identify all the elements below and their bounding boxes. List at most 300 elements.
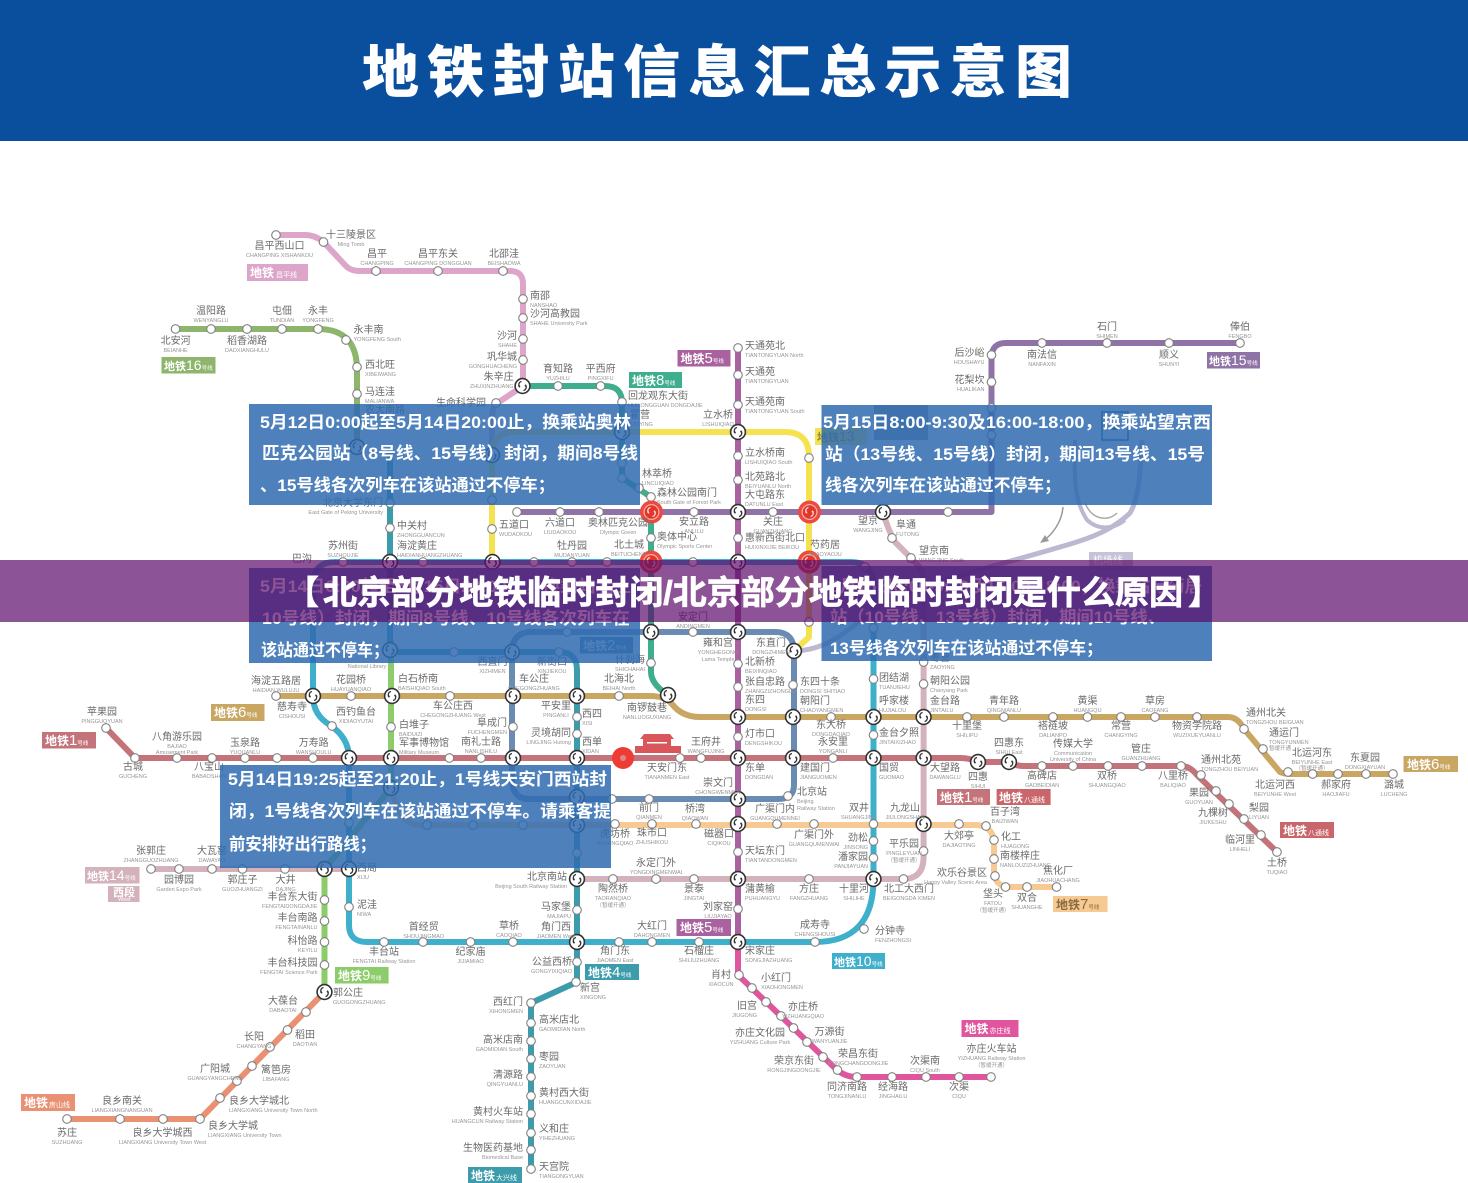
station labels: south-west: 苏庄 [57, 1128, 77, 1139]
badge: line 8: 地铁8号线 [632, 372, 676, 389]
station labels: south-west: MAJIAPU [547, 914, 571, 920]
station labels: north: 惠新西街北口 [745, 533, 805, 544]
station labels: north: 霍营 [630, 410, 650, 421]
station labels: east: GUOMAO [879, 775, 905, 781]
station labels: north: WANGJING South [919, 558, 964, 564]
station labels: east: DAJIAOTING [942, 843, 976, 849]
station labels: south-west: FENGTAINANLU [275, 925, 318, 931]
station labels: east: 九龙山 [890, 803, 920, 814]
station labels: east: 物资学院路 [1172, 721, 1222, 732]
station labels: south-west: LIANGXIANG University Town West [119, 1140, 207, 1146]
station labels: south-west: JIJIAMIAO [457, 959, 484, 965]
station labels: south-west: GAOMIDIAN North [539, 1027, 585, 1033]
station labels: north: CHANGPING DONGGUAN [404, 261, 472, 267]
station labels: east: 亦庄文化园 [735, 1028, 785, 1039]
station labels: north: WUDAOKOU [499, 532, 532, 538]
station labels: east: 暂缓开通 [1269, 744, 1292, 752]
station labels: north: ZHONGGUANCUN [397, 533, 445, 539]
badge: line 14 west section: West [118, 897, 131, 903]
station labels: centre and west: 大红门 [637, 921, 667, 932]
station labels: south-west: 天宫院 [539, 1162, 569, 1173]
line: Changping [276, 235, 523, 455]
station labels: south-west: LIANGXIANGNANGUAN [91, 1108, 153, 1114]
station labels: centre and west: National Library [348, 664, 387, 670]
station labels: south-west: 大葆台 [268, 996, 298, 1007]
station labels: south-west: 新宫 [580, 983, 600, 994]
badge: Batong line lower: 地铁八通线 [1283, 823, 1329, 838]
station labels: east: 金台夕照 [879, 728, 919, 739]
station labels: centre and west: CHONGWENMEN [695, 790, 741, 796]
station labels: centre and west: 西直门 [478, 657, 508, 668]
station labels: north: SHUNYI [1159, 362, 1180, 368]
station labels: north: 巩华城 [487, 352, 517, 363]
station labels: centre and west: 雍和宫 [703, 638, 733, 649]
station labels: east: YIZHUANG Railway Station [958, 1056, 1025, 1062]
station labels: east: GAOBEIDIAN [1025, 783, 1059, 789]
station labels: centre and west: 崇文门 [703, 778, 733, 789]
station labels: north: SHAOYAOJU [808, 552, 842, 558]
station labels: centre and west: 石榴庄 [684, 946, 714, 957]
station labels: south-west: 草桥 [499, 921, 519, 932]
station labels: south-west: DAOTIAN [293, 1042, 317, 1048]
station labels: east: FATOU [984, 901, 1002, 907]
station labels: centre and west: JINSONG [844, 845, 868, 851]
station labels: east: JINTAIXIZHAO [879, 740, 917, 746]
station labels: south-west: XINGONG [580, 995, 606, 1001]
station labels: east: 次渠南 [910, 1056, 940, 1067]
station labels: east: DONGXIAYUAN [1345, 765, 1385, 771]
station labels: south-west: 郭公庄 [333, 988, 363, 999]
station labels: south-west: DAWAYAO [199, 858, 226, 864]
station labels: centre and west: ZHANGZIZHONGLU [745, 689, 796, 695]
badge: line 14: 地铁14号线 [87, 867, 136, 883]
station labels: centre and west: 张自忠路 [745, 677, 785, 688]
station labels: south-west: XIHONGMEN [489, 1009, 523, 1015]
station labels: east: XIAOHONGMEN [761, 985, 803, 991]
station labels: north: 昌平 [367, 249, 387, 260]
station labels: south-west: ZHANGGUOZHUANG [124, 858, 178, 864]
station labels: east: 梨园 [1249, 803, 1269, 814]
line 16 [175, 329, 357, 450]
station labels: north: TIANTONGYUAN South [745, 409, 804, 415]
station labels: north: 顺义 [1159, 350, 1179, 361]
station labels: east: 四惠东 [994, 738, 1024, 749]
station labels: north: 沙河 [497, 331, 517, 342]
station labels: south-west: 大井 [276, 875, 296, 886]
station labels: centre and west: CISHOUSI [279, 714, 306, 720]
station labels: north: Olympic Sports Center [657, 544, 712, 550]
station labels: centre and west: 白石桥南 [398, 674, 438, 685]
station labels: east: SHUANGHE [1011, 905, 1043, 911]
station labels: centre and west: 北新桥 [745, 657, 775, 668]
station labels: east: University of China [1050, 757, 1097, 763]
station labels: north: 立水桥 [703, 410, 733, 421]
badge: line 2: 地铁2号线 [583, 637, 627, 654]
station labels: centre and west: BEIHAI North [602, 686, 636, 692]
station labels: centre and west: 十里河 [839, 884, 869, 895]
station labels: centre and west: DENGSHIKOU [745, 741, 782, 747]
Yizhuang line [738, 942, 991, 1077]
station labels: south-west: 稻田 [295, 1030, 315, 1041]
station labels: east: 国贸 [879, 763, 899, 774]
badge: Batong line upper: 地铁八通线 [999, 790, 1045, 805]
station labels: south-west: 良乡大学城 [208, 1121, 258, 1132]
station labels: north: GUANZHUANG [753, 529, 793, 535]
station labels: centre and west: 广渠门外 [794, 830, 834, 841]
station labels: centre and west: PINGGUOYUAN [81, 719, 123, 725]
station labels: centre and west [81, 636, 912, 964]
station labels: centre and west: CHENGSHOUSI [795, 932, 836, 938]
station labels: centre and west: 西四 [582, 709, 602, 720]
station labels: centre and west: FUCHENGMEN [468, 730, 507, 736]
station labels: north: SUZHOUJIE [327, 553, 359, 559]
station labels: centre and west: XIZHIMEN [479, 669, 506, 675]
icon: Tiananmen gate [635, 734, 681, 753]
station labels: north: FENGBO [1228, 334, 1252, 340]
station labels: east: CIQU [952, 1094, 966, 1100]
station labels: centre and west: PINGANLI [543, 713, 569, 719]
station labels: east: 北工大西门 [884, 884, 934, 895]
station labels: east: 常营 [1111, 721, 1131, 732]
station labels: north: 沙河高教园 [530, 309, 580, 320]
station labels: east: （暂缓开通） [1295, 764, 1329, 772]
station labels: centre and west: 古城 [123, 762, 143, 773]
station labels: centre and west: 王府井 [691, 737, 721, 748]
station labels: north: 生命科学园 [436, 396, 486, 409]
station labels: east: Communication [1054, 751, 1092, 757]
station labels: east: 潞城 [1384, 780, 1404, 791]
station labels: north: TIANTONGYUAN [745, 379, 789, 385]
station labels: east: HUANGQU [1073, 708, 1102, 714]
badge: Fangshan line: 地铁房山线 [24, 1095, 70, 1110]
station labels: centre and west: 苹果园 [87, 707, 117, 718]
station labels: east: XIAOCUN [708, 982, 734, 988]
station labels: south-west: SUZHUANG [52, 1140, 82, 1146]
station labels: north: 永丰 [308, 306, 328, 317]
station labels: south-west: 科怡路 [288, 936, 318, 947]
station labels: centre and west: NANLUOGUXIANG [623, 715, 671, 721]
airport express line [794, 440, 1142, 651]
station labels: east: BAIZIWAN [992, 819, 1018, 825]
station labels: east: 百子湾 [990, 807, 1020, 818]
station labels: east: 亦庄火车站 [966, 1044, 1016, 1055]
station labels: centre and west: PANJIAYUAN [834, 864, 868, 870]
station labels: centre and west: 玉泉路 [230, 738, 260, 749]
station labels: north: 中关村 [397, 521, 427, 532]
badge: Changping line: 地铁 昌平线 [250, 265, 297, 280]
station labels: centre and west: TAORANQIAO [595, 896, 632, 902]
station labels: centre and west: XISI [582, 721, 593, 727]
station labels: centre and west: （暂缓开通） [596, 901, 630, 909]
station labels: east: BEIGONGDA XIMEN [883, 896, 935, 902]
station labels: south-west: 首经贸 [409, 922, 439, 933]
station labels: east: RONGCHANGDONGJIE [828, 1061, 889, 1067]
station labels: east: 十里堡 [952, 721, 982, 732]
station labels: north: BEIYUANLU North [745, 484, 791, 490]
station labels: centre and west: 灵境胡同 [531, 728, 571, 739]
station labels: centre and west: 成寿寺 [800, 920, 830, 931]
station labels: south-west: 马家堡 [541, 902, 571, 913]
station labels: centre and west: 方庄 [799, 884, 819, 895]
station labels: north: 平西府 [586, 364, 616, 375]
station labels: east: 北运河东 [1292, 748, 1332, 759]
station labels: centre and west: 阜成门 [477, 718, 507, 729]
station labels: east: 亦庄桥 [788, 1002, 818, 1013]
badge: line 14 west section: 西段 [113, 887, 135, 899]
station labels: south-west: GAOMIDIAN South [476, 1047, 523, 1053]
station labels: centre and west: ZHUSHIKOU [636, 840, 668, 846]
panel: Tiananmen West closure notice: 闭，1号线各次列车在该站通过不停车。请乘客提 [229, 801, 611, 821]
panel: Tiananmen West closure notice [220, 765, 611, 868]
station labels: east: 南楼梓庄 [1000, 851, 1040, 862]
station labels: north: 北土城 [614, 540, 644, 551]
header bar [0, 0, 1468, 141]
station labels: east: 东夏园 [1350, 753, 1380, 764]
station labels: centre and west: YONGDINGMENWAI [630, 870, 683, 876]
station labels: north: 芍药居 [810, 540, 840, 551]
station labels: centre and west: SONGJIAZHUANG [745, 958, 792, 964]
station labels: east: WANYUANJIE [812, 1039, 848, 1045]
station labels: centre and west: SHICHAHAI [615, 667, 645, 673]
station labels: north: 海淀黄庄 [397, 541, 437, 552]
station labels: centre and west: 分钟寺 [875, 926, 905, 937]
panel: Olympic Green closure notice: 、15号线各次列车在该站通过不停车； [260, 475, 555, 495]
station labels: east: 垡头 [983, 889, 1003, 900]
station labels: east: JIUGONG [732, 1013, 757, 1019]
station labels: east: 大望路 [930, 763, 960, 774]
station labels: east: 呼家楼 [879, 696, 909, 707]
line 2 ring [512, 632, 794, 799]
station labels: east: JINTAILU [930, 708, 953, 714]
station labels: east: CAOFANG [1142, 708, 1168, 714]
station labels: east: WUZIXUEYUANLU [1173, 733, 1221, 739]
station labels: south-west: 丰台科技园 [268, 958, 318, 969]
station labels: east: 荣昌东街 [838, 1049, 878, 1060]
station labels: north: 稻香湖路 [227, 336, 267, 347]
station labels: south-west: LIANGXIANG University Town [208, 1133, 282, 1139]
station labels: north: TIANTONGYUAN North [745, 353, 804, 359]
station labels: north: LISHUIQIAO South [745, 460, 792, 466]
station labels: east: 平乐园 [889, 839, 919, 850]
station labels: south-west: CHANGYANG [236, 1044, 272, 1050]
station labels: east: 通州北关 [1246, 708, 1286, 719]
station labels: east: BALIQIAO [1160, 783, 1187, 789]
station labels: south-west: XIJU [357, 875, 369, 881]
station labels: centre and west: 永定门外 [636, 858, 676, 869]
station labels: east: LINHELI [1230, 847, 1251, 853]
station labels: north: NANFAXIN [1028, 362, 1056, 368]
station labels: north: East Gate of Peking University [308, 510, 383, 516]
station labels: south-west: 泥洼 [357, 900, 377, 911]
station labels: centre and west: HUFANGQIAO [597, 841, 634, 847]
station labels: east: 金台路 [930, 696, 960, 707]
station labels: east: SHUANGQIAO [1088, 783, 1126, 789]
badge: line 15: 地铁15号线 [1209, 352, 1258, 368]
station labels: east: YIZHUANG Culture Park [730, 1040, 791, 1046]
station labels: east: 青年路 [989, 696, 1019, 707]
station labels: south-west: HUANGCUNXIDAJIE [539, 1100, 592, 1106]
station labels: south-west: 大瓦窑 [197, 846, 227, 857]
station labels: east: 管庄 [1131, 744, 1151, 755]
station labels: east: 万源街 [814, 1027, 844, 1038]
station labels: centre and west: 陶然桥 [598, 884, 628, 895]
station labels: centre and west: 东直门 [756, 638, 786, 649]
station labels: north: LIUDAOKOU [544, 530, 576, 536]
station labels: south-west: ZAOYUAN [539, 1064, 566, 1070]
line 5 [735, 348, 741, 942]
station labels: centre and west: 东单 [745, 763, 765, 774]
icon: closed Tiananmen West station [612, 747, 634, 769]
station labels: east: 化工 [1001, 832, 1021, 843]
badge: airport express: 机场线 [1093, 554, 1123, 567]
station labels: south-west: FENGTAIDONGDAJIE [262, 904, 318, 910]
station labels: centre and west: 东四十条 [800, 677, 840, 688]
panel: Beitucheng closure notice: 5月14日0:00起至5月15日20:00止，换乘站北土 [260, 577, 631, 596]
station labels: east: 旧宫 [737, 1001, 757, 1012]
station labels: south-west: SHOUJINGMAO [403, 934, 445, 940]
station labels: east: GUOYUAN [1185, 800, 1213, 806]
station labels: south-west [52, 844, 606, 1180]
station labels: centre and west: FENZHONGSI [875, 938, 912, 944]
station labels: centre and west: YONGANLI [819, 749, 848, 755]
station labels: centre and west: 东大桥 [816, 720, 846, 731]
station labels: centre and west: QIAOWAN [682, 816, 708, 822]
station labels: north: Olympic Green [600, 530, 636, 536]
station labels: south-west: 黄村西大街 [539, 1088, 589, 1099]
station labels: north: MUDANYUAN [554, 553, 590, 559]
station labels: centre and west: GUCHENG [119, 774, 147, 780]
station labels: south-west: Biomedical Base [482, 1155, 523, 1161]
station labels: north: HUOYING [627, 422, 653, 428]
station labels: east: Happy Valley Scenic Area [924, 880, 988, 886]
badge: line 16: 地铁16号线 [164, 357, 213, 373]
panel: Tiananmen West closure notice: 5月14日19:25起至21:20止，1号线天安门西站封 [228, 770, 607, 789]
station labels: south-west: 北京南站 [527, 872, 567, 883]
station labels: centre and west: DAHONGMEN [634, 933, 670, 939]
station labels: north: HUILONGGUAN DONGDAJIE [628, 403, 703, 409]
station labels: north: 立水桥南 [745, 448, 785, 459]
station labels: centre and west: 景泰 [684, 884, 704, 895]
station labels: north: 大屯路东 [745, 490, 785, 501]
station labels: north: 望京 [858, 516, 878, 527]
station labels: south-west: TIANGONGYUAN [539, 1174, 584, 1180]
panel: Beitucheng closure notice: 该站通过不停车； [261, 640, 389, 660]
station labels: south-west: QINGYUANLU [487, 1082, 523, 1088]
station labels: east: SHILIPU [956, 733, 978, 739]
station labels: centre and west: 蒲黄榆 [745, 884, 775, 895]
panel: Olympic Green closure notice: 匹克公园站（8号线、15号线）封闭，期间8号线 [262, 444, 638, 463]
station labels: centre and west: TIANANMEN East [645, 775, 690, 781]
station labels: south-west: 高米店北 [539, 1015, 579, 1026]
station labels: east: NANLOUZIZHUANG [1000, 863, 1051, 869]
station labels: north: YONGFENG South [354, 337, 401, 343]
station labels: south-west: 园博园 [164, 875, 194, 886]
station labels: north: 北京大学东门 [323, 498, 383, 509]
station labels: north: FUTONG [896, 532, 919, 538]
station labels: south-west: 丰台南路 [278, 913, 318, 924]
station labels: centre and west: 天坛东门 [745, 846, 785, 857]
badge: Yizhuang line [962, 1020, 1018, 1037]
station labels: centre and west: SHILIHE [843, 896, 865, 902]
line 4 and Daxing [390, 448, 577, 1169]
station labels: centre and west: HUAYUANQIAO [331, 687, 372, 693]
station labels: centre and west: 八角游乐园 [152, 732, 202, 743]
station labels: east: 果园 [1189, 788, 1209, 799]
station labels: east: PINGLEYUAN [886, 851, 922, 857]
station labels: north: 俸伯 [1230, 322, 1250, 333]
station labels: centre and west: 什刹海 [615, 655, 645, 666]
station labels: east: BEIYUNHE East [1292, 760, 1333, 766]
station labels: east: TONGJINANLU [828, 1094, 866, 1100]
station labels: centre and west: 万寿路 [299, 738, 329, 749]
badge: line 6 west: 地铁6号线 [214, 704, 258, 721]
station labels: south-west: 长阳 [244, 1032, 264, 1043]
station labels: centre and west: 朝阳门 [800, 696, 830, 707]
station labels: east: QINGNIANLU [987, 708, 1021, 714]
station labels: east: LUCHENG [1381, 792, 1407, 798]
station labels: centre and west: HAIDIAN WULUJU [253, 688, 299, 694]
station labels: north: TUNDIAN [270, 318, 294, 324]
badge: line 5 south: 地铁5号线 [680, 919, 724, 936]
station labels: north: 天通苑南 [745, 397, 785, 408]
station labels: centre and west: 车公庄西 [433, 701, 473, 712]
station labels: north: 花梨坎 [954, 375, 984, 386]
station labels: north: HAIDIANHUANGZHUANG [397, 553, 462, 559]
station labels: east: 草房 [1145, 696, 1165, 707]
station labels: north: 育知路 [543, 364, 573, 375]
panel: Wangjing West closure notice: 5月15日8:00-9:30及16:00-18:00，换乘站望京西 [823, 412, 1211, 432]
station labels: centre and west: 珠市口 [637, 828, 667, 839]
station labels: south-west: 枣园 [539, 1052, 559, 1063]
station labels: centre and west: 劲松 [848, 833, 868, 844]
station labels: centre and west: GUANGQUMENNEI [750, 816, 800, 822]
station labels: north: DAOXIANGHULU [225, 348, 269, 354]
station labels: south-west: 生物医药基地 [463, 1143, 523, 1154]
station labels: east: 团结湖 [879, 673, 909, 684]
station labels: east: TUQIAO [1266, 870, 1288, 876]
panel: Shaoyaoju closure notice: 站（10号线、13号线）封闭，期间10号线、 [830, 608, 1165, 627]
station labels: centre and west: SHILIUZHUANG [679, 958, 719, 964]
station labels: north: Ming Tomb [338, 242, 364, 248]
station labels: north: 牡丹园 [557, 541, 587, 552]
station labels: north: 北邵洼 [489, 249, 519, 260]
badge: Changping line [247, 264, 308, 281]
station labels: east: Chaoyang Park [930, 688, 968, 694]
panel: Tiananmen West closure notice: 前安排好出行路线； [229, 835, 376, 854]
station labels: centre and west: XIDIAOYUTAI [339, 719, 374, 725]
station labels: north: 苏州街 [328, 541, 358, 552]
station labels: north: 昌平东关 [418, 249, 458, 260]
station labels: north: HUALIKAN [957, 387, 985, 393]
station labels: east: TONGZHOU BEIYUAN [1201, 767, 1258, 773]
badge: line 10: 地铁10号线 [834, 953, 883, 969]
station labels: north: ANLILU [684, 529, 704, 535]
station labels: north: 六道口 [545, 518, 575, 529]
station labels: east: JIAOHUACHANG [1036, 878, 1080, 884]
station labels: south-west: CAOQIAO [496, 933, 523, 939]
line 6 [276, 696, 1393, 774]
station labels: centre and west: 海淀五路居 [251, 676, 301, 687]
station labels: centre and west: 灯市口 [745, 729, 775, 740]
station labels: east: JIULONGSHAN [885, 815, 925, 821]
station labels: centre and west: 北海北 [604, 674, 634, 685]
station labels: centre and west: XINJIEKOU [537, 669, 567, 675]
station labels: south-west: DAJING [276, 887, 296, 893]
station labels: east: DALIANPO [1039, 733, 1068, 739]
station labels: south-west: LIBAFANG [263, 1077, 289, 1083]
station labels: south-west: 良乡大学城北 [229, 1096, 289, 1107]
station labels: south-west: Garden Expo Park [156, 887, 202, 893]
